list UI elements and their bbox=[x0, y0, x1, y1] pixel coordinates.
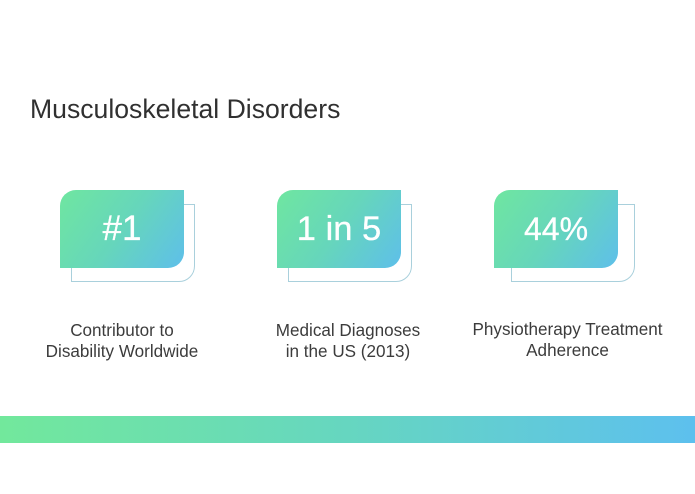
label 2 bbox=[276, 321, 420, 361]
label 1: Disability Worldwide bbox=[46, 342, 198, 361]
panel: stat 1 bbox=[46, 190, 198, 361]
label 1: Contributor to bbox=[70, 321, 174, 340]
label 1 bbox=[46, 321, 198, 361]
gradient bar bbox=[0, 416, 695, 443]
card outline 3 bbox=[511, 204, 635, 282]
card 2 bbox=[277, 190, 401, 268]
card 1: #1 bbox=[103, 209, 141, 248]
card 1 bbox=[60, 190, 184, 268]
card 3 bbox=[494, 190, 618, 268]
label 2: Medical Diagnoses bbox=[276, 321, 420, 340]
label 3 bbox=[472, 320, 663, 360]
panel: stat 3 bbox=[472, 190, 663, 360]
card 2: 1 in 5 bbox=[297, 210, 381, 248]
card 3: 44% bbox=[524, 211, 588, 247]
panel: stat 2 bbox=[276, 190, 420, 361]
title: Musculoskeletal Disorders bbox=[30, 94, 340, 124]
label 3: Physiotherapy Treatment bbox=[472, 320, 663, 339]
card outline 2 bbox=[288, 204, 412, 282]
card outline 1 bbox=[71, 204, 195, 282]
label 3: Adherence bbox=[526, 341, 609, 360]
label 2: in the US (2013) bbox=[286, 342, 410, 361]
